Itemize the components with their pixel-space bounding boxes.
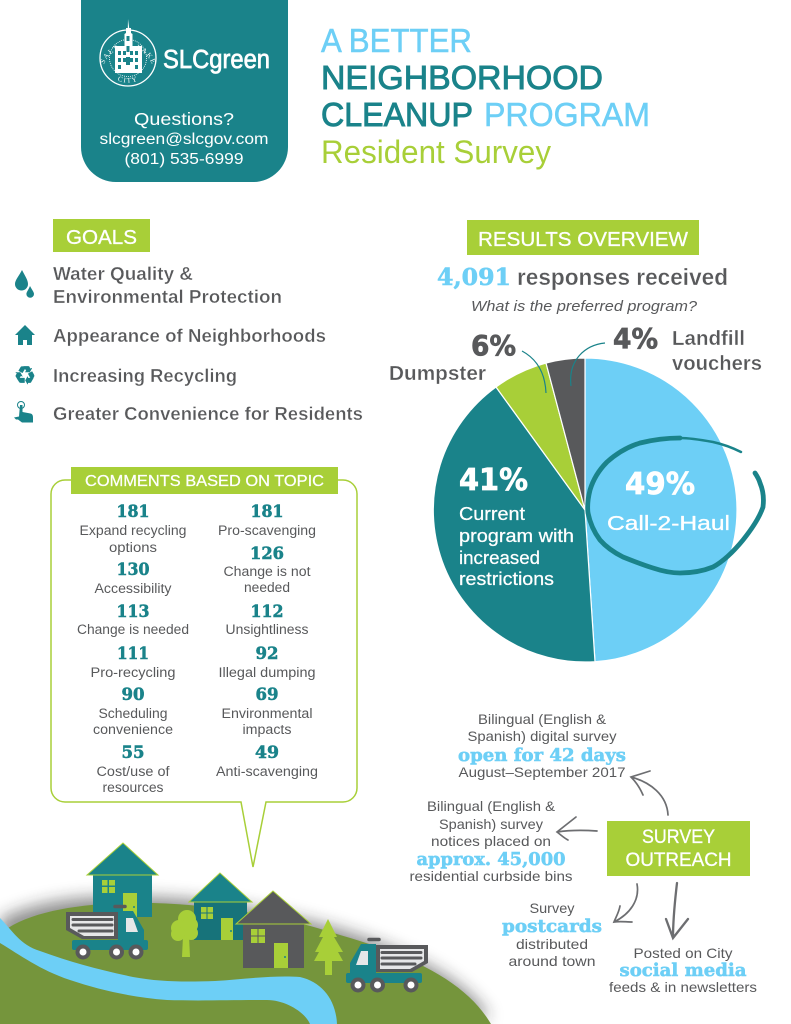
- house 3: [236, 891, 311, 968]
- outreach: social media: social media: [620, 960, 747, 981]
- right column of comment counts: [216, 502, 318, 779]
- pie label: 6% Dumpster: Dumpster: [389, 363, 486, 385]
- left column of comment counts: Cost/use of: [96, 764, 170, 779]
- outreach: postcards: around town: [508, 953, 596, 969]
- outreach: curbside notices: residential curbside bins: [410, 868, 572, 884]
- title: A BETTER: [321, 22, 472, 59]
- contact details: (801) 535-6999: [124, 151, 244, 168]
- title: Resident Survey: [321, 134, 551, 170]
- left column of comment counts: Accessibility: [94, 581, 172, 596]
- pie label: 4% Landfill vouchers: vouchers: [672, 353, 762, 375]
- outreach: curbside notices: approx. 45,000: [416, 849, 566, 870]
- goals heading: [53, 219, 150, 252]
- truck 2: [346, 940, 428, 992]
- callout circle around 49%: [588, 438, 763, 573]
- house 1: [87, 843, 158, 917]
- left column of comment counts: convenience: [93, 722, 173, 737]
- logo: Salt Lake City seal: CITY: [118, 76, 136, 83]
- slice: dumpster 6%: [496, 363, 585, 510]
- right column of comment counts: Illegal dumping: [218, 665, 316, 680]
- left column of comment counts: 55: [122, 743, 144, 763]
- left column of comment counts: options: [109, 540, 157, 555]
- title: PROGRAM: [484, 96, 650, 133]
- goals list: Increasing Recycling: [53, 366, 237, 386]
- outreach: curbside notices: Bilingual (English &: [427, 798, 556, 814]
- contact details: Questions?: [134, 109, 234, 129]
- responses received: [437, 264, 728, 291]
- left column of comment counts: 111: [117, 644, 149, 664]
- right column of comment counts: 92: [256, 644, 278, 664]
- logo: Salt Lake City seal: [99, 19, 157, 87]
- outreach: postcards: [502, 900, 602, 969]
- icon: water drops: [15, 270, 34, 298]
- title: NEIGHBORHOOD: [321, 59, 603, 96]
- icon: round tree: [171, 910, 198, 957]
- left column of comment counts: 181: [116, 502, 150, 522]
- right column of comment counts: 181: [250, 502, 284, 522]
- pie label: 49% Call-2-Haul: Call-2-Haul: [607, 513, 730, 535]
- goals list: [53, 264, 363, 424]
- icon: pine tree: [314, 919, 343, 975]
- pie label: 41% current program: Current: [459, 504, 525, 524]
- outreach: postcards: Survey: [530, 900, 574, 916]
- arrow to curbside notices: [557, 817, 597, 840]
- logo wordmark: SLCgreen: [163, 46, 270, 74]
- right column of comment counts: Pro-scavenging: [218, 523, 316, 538]
- goals list: Appearance of Neighborhoods: [53, 326, 326, 346]
- contact details: [100, 109, 268, 168]
- survey outreach badge: SURVEY: [642, 827, 715, 848]
- pie chart: [433, 358, 737, 662]
- left column of comment counts: resources: [102, 780, 164, 795]
- pie label: 41% current program: restrictions: [459, 569, 554, 589]
- house 2: [189, 873, 252, 940]
- responses received: responses received: [517, 264, 728, 290]
- goals list: Greater Convenience for Residents: [53, 404, 363, 424]
- left column of comment counts: [77, 502, 189, 795]
- results overview heading: RESULTS OVERVIEW: [478, 229, 688, 251]
- outreach: social media: feeds & in newsletters: [609, 979, 757, 995]
- pie label: 4% Landfill vouchers: [571, 322, 762, 386]
- slice: current program 41%: [433, 387, 595, 662]
- outreach: curbside notices: [410, 798, 572, 884]
- truck 1: [66, 906, 148, 960]
- arrow to social media: [666, 883, 688, 938]
- right column of comment counts: Environmental: [222, 706, 312, 721]
- responses received: 4,091: [437, 264, 511, 291]
- hill: [0, 903, 491, 1024]
- survey outreach badge: [607, 821, 750, 876]
- slice: Call-2-Haul 49%: [585, 358, 737, 662]
- left column of comment counts: 90: [122, 685, 145, 705]
- right column of comment counts: 126: [250, 544, 284, 564]
- right column of comment counts: Unsightliness: [226, 622, 309, 637]
- outreach: postcards: distributed: [516, 936, 588, 952]
- pie label: 41% current program: program with: [459, 526, 574, 546]
- river: [0, 918, 337, 1024]
- outreach: curbside notices: notices placed on: [431, 833, 551, 849]
- comments heading: COMMENTS BASED ON TOPIC: [85, 473, 324, 490]
- right column of comment counts: Change is not: [224, 564, 311, 579]
- slice: landfill vouchers 4%: [546, 358, 585, 510]
- goals heading: GOALS: [66, 227, 137, 249]
- pie label: 41% current program: increased: [459, 548, 540, 568]
- outreach: digital survey: August–September 2017: [458, 764, 626, 780]
- contact details: slcgreen@slcgov.com: [100, 131, 268, 148]
- logo: Salt Lake City seal: LAKE: [138, 44, 156, 64]
- title: CLEANUP: [321, 96, 473, 133]
- outreach: social media: Posted on City: [634, 945, 732, 961]
- outreach: social media: [609, 945, 757, 995]
- logo: Salt Lake City seal: SALT: [100, 45, 116, 64]
- title: [321, 22, 650, 170]
- left column of comment counts: 113: [116, 602, 150, 622]
- pie label: 4% Landfill vouchers: 4%: [613, 322, 658, 355]
- outreach: curbside notices: Spanish) survey: [439, 816, 543, 832]
- header card: [81, 0, 288, 182]
- left column of comment counts: Pro-recycling: [90, 665, 176, 680]
- results overview heading: [467, 220, 699, 255]
- illustration: neighborhood hillside: [0, 843, 491, 1024]
- comments heading: [71, 467, 338, 494]
- pie label: 41% current program: 41%: [459, 463, 528, 498]
- right column of comment counts: needed: [244, 580, 290, 595]
- right column of comment counts: Anti-scavenging: [216, 764, 318, 779]
- pie label: 6% Dumpster: 6%: [471, 329, 516, 362]
- survey outreach badge: OUTREACH: [626, 850, 732, 871]
- pie label: 6% Dumpster: [389, 329, 546, 393]
- survey question: What is the preferred program?: [471, 299, 698, 315]
- icon: pointing hand: [14, 402, 33, 422]
- outreach: digital survey: open for 42 days: [458, 745, 626, 766]
- outreach: digital survey: [458, 711, 626, 780]
- hill shadow: [0, 896, 490, 1018]
- left column of comment counts: 130: [116, 560, 150, 580]
- pie label: 4% Landfill vouchers: Landfill: [672, 328, 745, 350]
- goals list: Environmental Protection: [53, 287, 282, 307]
- right column of comment counts: 49: [255, 743, 279, 763]
- arrow to digital survey: [631, 771, 668, 815]
- right column of comment counts: impacts: [242, 722, 292, 737]
- outreach: digital survey: Spanish) digital survey: [468, 728, 616, 744]
- left column of comment counts: Scheduling: [98, 706, 168, 721]
- goals list: Water Quality &: [53, 264, 193, 284]
- pie label: 49% Call-2-Haul: [607, 467, 730, 535]
- arrow to postcards: [614, 884, 638, 922]
- icon: home: [15, 325, 35, 345]
- right column of comment counts: 69: [256, 685, 278, 705]
- panel: comments based on topic: [51, 467, 357, 867]
- outreach: digital survey: Bilingual (English &: [478, 711, 607, 727]
- icon: recycling: ♻: [14, 361, 36, 390]
- left column of comment counts: Expand recycling: [80, 523, 186, 538]
- outreach: postcards: postcards: [502, 916, 602, 937]
- pie label: 49% Call-2-Haul: 49%: [625, 467, 695, 502]
- pie label: 41% current program: [459, 463, 574, 589]
- left column of comment counts: Change is needed: [77, 622, 189, 637]
- right column of comment counts: 112: [250, 602, 284, 622]
